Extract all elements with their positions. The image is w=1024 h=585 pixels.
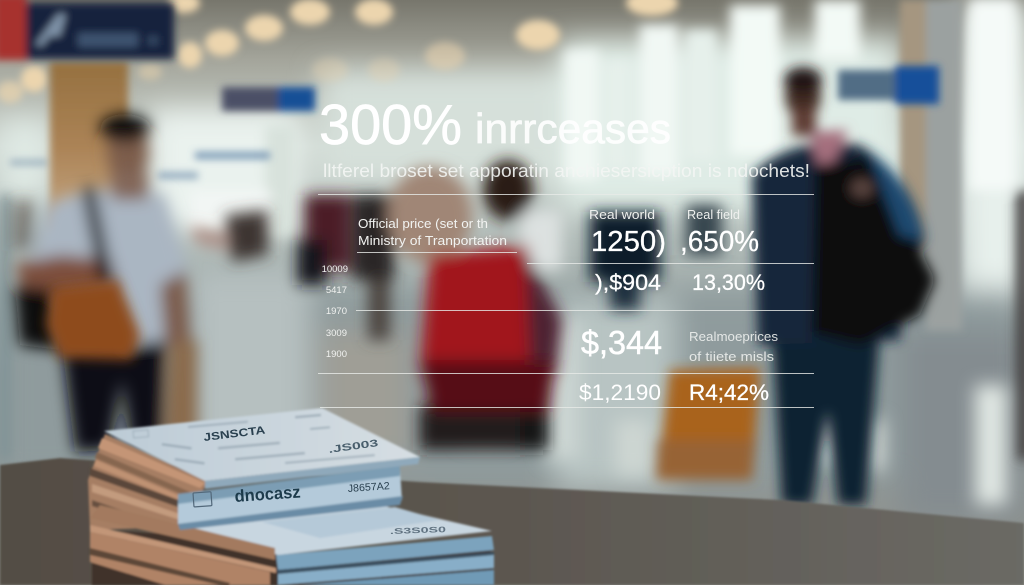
title: 300% [319,93,462,157]
blurred ceiling lights [0,0,678,103]
blurred traveller left with orange bag [12,114,268,452]
row 4 values [579,380,769,405]
column heading: real world: Real world [589,207,655,222]
row 3 note [689,329,779,364]
row 1 values: ,650% [680,226,759,258]
title [319,93,671,157]
blurred orange suitcase [656,368,760,480]
row 2 values [595,270,765,295]
column heading: official price: Official price (set or th [358,216,488,231]
column heading: official price [358,216,507,248]
top ticket [104,408,420,530]
lower ticket stack [90,505,494,585]
row 4 values: $1,2190 [579,380,661,405]
title: inrrceases [475,105,671,152]
left axis numbers [322,264,348,360]
column heading: real field: Real field [687,207,740,222]
blurred traveller right with backpack [752,67,935,505]
left axis numbers: 1900 [326,349,347,360]
airline sign [0,0,174,60]
subtitle: lltferel broset set apporatin anchiesersicption is ndochets! [323,160,810,181]
ticket text [203,425,447,536]
row 2 values: ),$904 [595,270,661,295]
table surface [0,458,1024,585]
ticket printed details [133,414,375,465]
row 1 values: 1250) [591,226,666,258]
table rules [318,194,814,408]
ticket checkbox [193,492,212,507]
left edge of stacked tickets [88,434,276,573]
row 3 note: of tiiete misls [689,349,775,364]
row 3 value: $,344 [581,324,662,361]
row 4 values: R4;42% [689,380,769,405]
ticket text: JSNSCTA [203,425,266,444]
row 2 values: 13,30% [692,270,765,295]
blurred travellers centre with red backpack [297,160,722,450]
ticket text: .JS003 [328,438,380,456]
pillars [50,0,962,330]
row 3 note: Realmoeprices [689,329,779,344]
left axis numbers: 3009 [326,328,347,339]
left axis numbers: 5417 [326,285,347,296]
blurred blue signs [222,66,939,111]
ticket text: J8657A2 [347,480,390,495]
left axis numbers: 10009 [322,264,348,275]
row 1 values [591,226,759,258]
ticket stack [88,408,494,585]
column heading: official price: Ministry of Tranportation [358,233,507,248]
left axis numbers: 1970 [326,306,347,317]
ticket text: dnocasz [234,482,301,506]
ticket text: .S3S0S0 [390,525,447,536]
